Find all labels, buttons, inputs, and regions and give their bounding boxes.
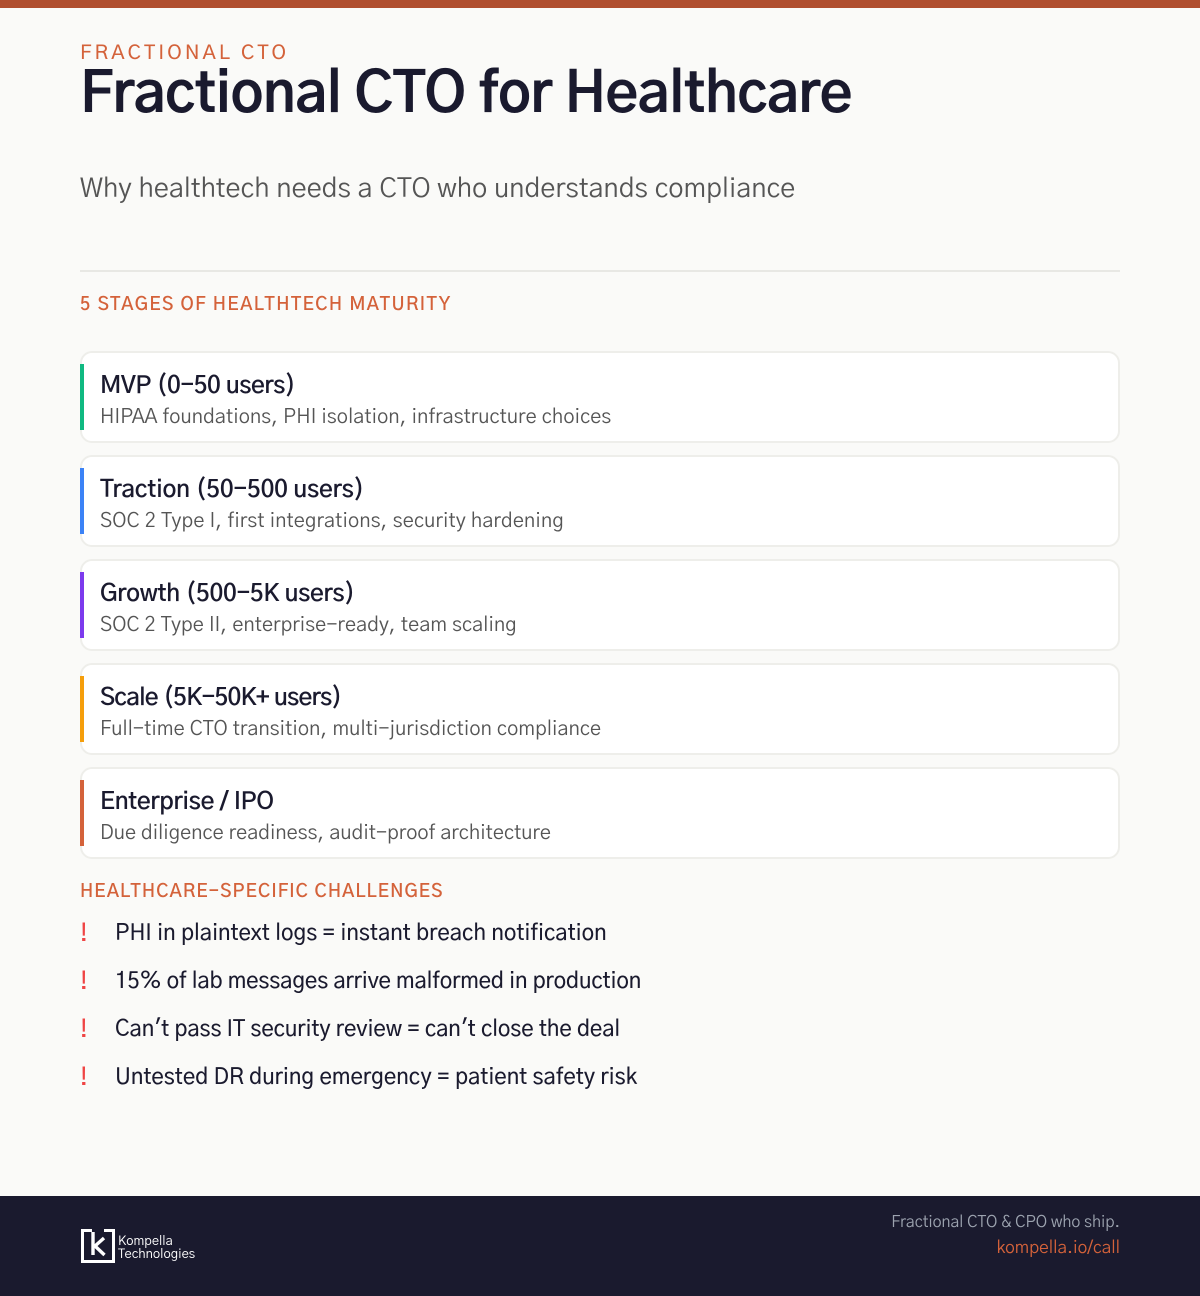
logo wordmark: Kompella bbox=[118, 1235, 173, 1248]
challenge 3: ! bbox=[80, 1018, 88, 1042]
card: Scale: Scale (5K-50K+ users) bbox=[100, 686, 342, 710]
challenge 2: 15% of lab messages arrive malformed in production bbox=[115, 971, 641, 993]
tagline: Fractional CTO & CPO who ship. bbox=[891, 1215, 1120, 1231]
logo wordmark bbox=[118, 1235, 195, 1261]
card: Scale bbox=[80, 663, 1120, 755]
eyebrow label: FRACTIONAL CTO bbox=[80, 44, 289, 64]
card: Growth: SOC 2 Type II, enterprise-ready, team scaling bbox=[100, 616, 517, 636]
footer link: kompella.io/call bbox=[997, 1240, 1120, 1257]
card: Traction: SOC 2 Type I, first integrations, security hardening bbox=[100, 512, 564, 532]
logo bbox=[81, 1229, 195, 1263]
card: MVP bbox=[80, 351, 1120, 443]
challenge 3: Can't pass IT security review = can't close the deal bbox=[115, 1019, 620, 1041]
card: Growth: Growth (500-5K users) bbox=[100, 582, 355, 606]
challenge 2: ! bbox=[80, 970, 88, 994]
challenge 1: ! bbox=[80, 922, 88, 946]
logo wordmark: Technologies bbox=[118, 1248, 195, 1261]
subtitle: Why healthtech needs a CTO who understands compliance bbox=[80, 176, 795, 203]
challenge 1: PHI in plaintext logs = instant breach notification bbox=[115, 923, 607, 945]
card: Traction: Traction (50-500 users) bbox=[100, 478, 364, 502]
top accent bar bbox=[0, 0, 1200, 8]
card: MVP: MVP (0-50 users) bbox=[100, 374, 296, 398]
section heading: stages: 5 STAGES OF HEALTHTECH MATURITY bbox=[80, 296, 452, 314]
title: Fractional CTO for Healthcare bbox=[80, 68, 852, 124]
section heading: challenges: HEALTHCARE-SPECIFIC CHALLENGES bbox=[80, 883, 444, 901]
challenge 4: ! bbox=[80, 1066, 88, 1090]
card: Growth bbox=[80, 559, 1120, 651]
card: Enterprise bbox=[80, 767, 1120, 859]
card: Traction bbox=[80, 455, 1120, 547]
card: MVP: HIPAA foundations, PHI isolation, infrastructure choices bbox=[100, 408, 611, 428]
card: Enterprise: Due diligence readiness, audit-proof architecture bbox=[100, 824, 551, 844]
card: Scale: Full-time CTO transition, multi-jurisdiction compliance bbox=[100, 720, 601, 740]
card: Enterprise: Enterprise / IPO bbox=[100, 790, 274, 814]
icon: logo mark bbox=[81, 1229, 115, 1263]
footer bbox=[0, 1196, 1200, 1296]
challenge 4: Untested DR during emergency = patient safety risk bbox=[115, 1067, 637, 1089]
